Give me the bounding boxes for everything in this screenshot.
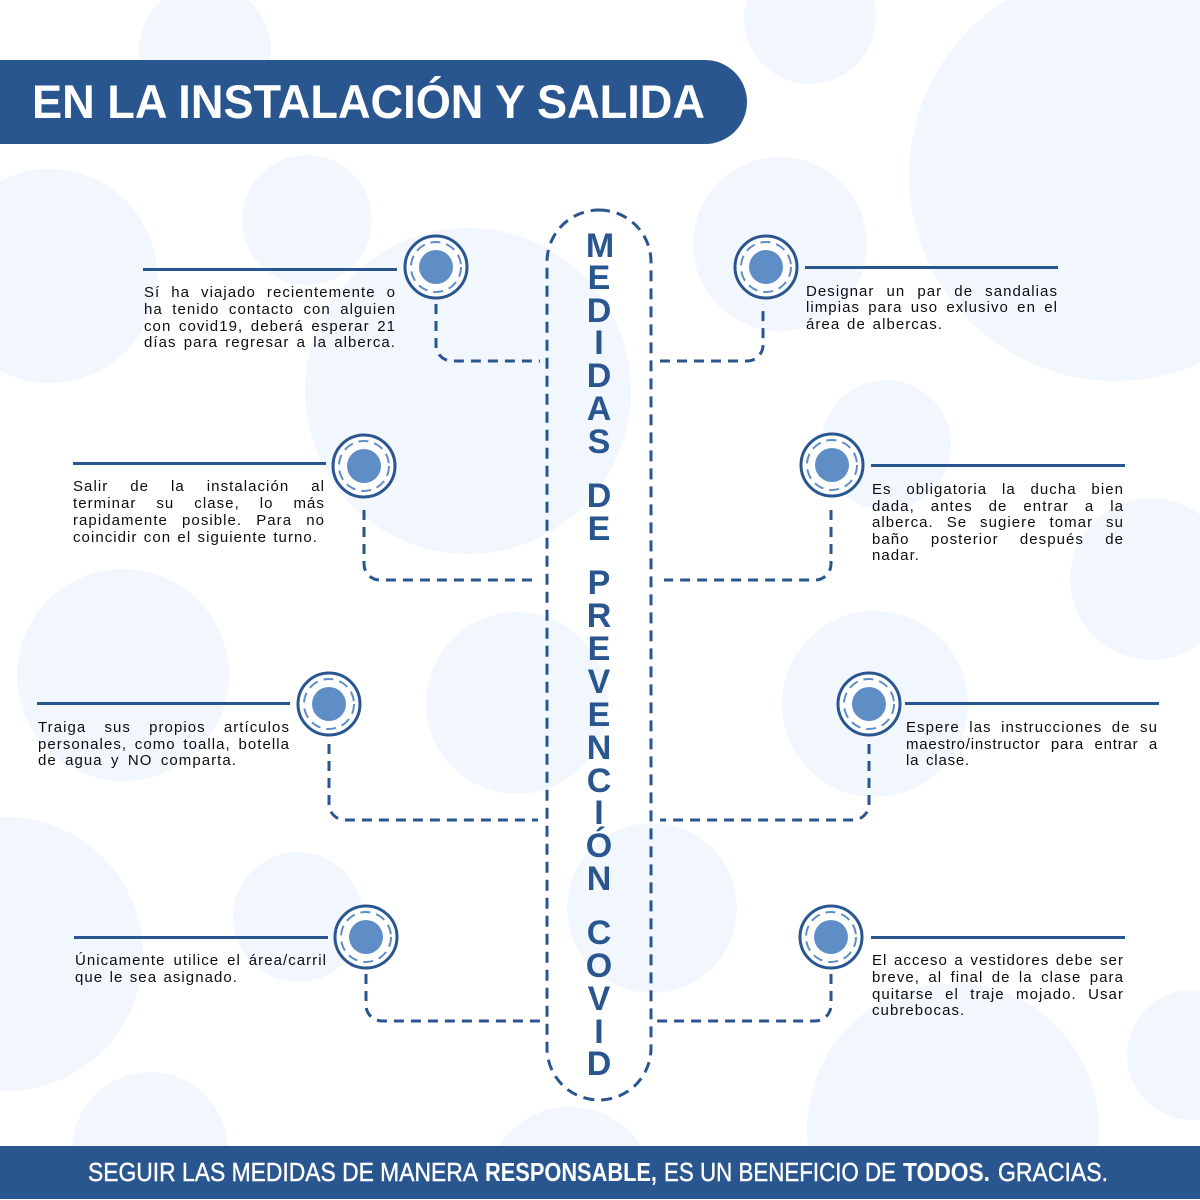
text: de agua y NO comparta.	[38, 752, 237, 769]
text: terminar su clase, lo más	[73, 495, 325, 512]
icon: node	[798, 904, 864, 970]
text: alberca. Se sugiere tomar su	[872, 514, 1124, 531]
text: Espere las instrucciones de su	[906, 719, 1158, 736]
text: limpias para uso exlusivo en el	[806, 299, 1058, 316]
text: breve, al final de la clase para	[872, 969, 1124, 986]
title banner	[0, 60, 747, 144]
item: viaje reciente	[143, 234, 540, 362]
icon: node	[800, 432, 864, 498]
item: artículos personales	[37, 672, 538, 822]
text	[38, 719, 290, 769]
item: instrucciones	[660, 672, 1159, 822]
text: quitarse el traje mojado. Usar	[872, 986, 1124, 1003]
icon: node	[734, 234, 798, 300]
footer banner	[0, 1146, 1200, 1199]
text	[144, 284, 396, 351]
item: salir de la instalación	[73, 434, 532, 582]
text	[906, 719, 1158, 769]
text: nadar.	[872, 547, 920, 564]
text: coincidir con el siguiente turno.	[73, 529, 318, 546]
text: personales, como toalla, botella	[38, 736, 290, 753]
text: Designar un par de sandalias	[806, 283, 1058, 300]
item: vestidores	[657, 904, 1125, 1022]
text: Traiga sus propios artículos	[38, 719, 290, 736]
item: área asignada	[74, 904, 540, 1022]
text	[73, 478, 325, 546]
item: sandalias	[660, 234, 1058, 362]
icon: node	[404, 234, 468, 300]
title: EN LA INSTALACIÓN Y SALIDA	[32, 75, 705, 128]
text: El acceso a vestidores debe ser	[872, 952, 1124, 969]
text: maestro/instructor para entrar a	[906, 736, 1158, 753]
text: cubrebocas.	[872, 1002, 965, 1019]
vertical heading: MEDIDAS DE PREVENCIÓN COVID	[586, 227, 614, 1083]
footer message: TODOS.	[903, 1157, 990, 1187]
text: área de albercas.	[806, 316, 943, 333]
footer message	[88, 1157, 1108, 1187]
text: que le sea asignado.	[75, 969, 238, 986]
text	[75, 952, 327, 986]
text: Salir de la instalación al	[73, 478, 325, 495]
text	[872, 481, 1124, 564]
item: ducha	[664, 432, 1125, 582]
text: Únicamente utilice el área/carril	[75, 952, 327, 969]
text: dada, antes de entrar a la	[872, 498, 1124, 515]
footer message: GRACIAS.	[998, 1157, 1108, 1187]
text: la clase.	[906, 752, 970, 769]
text: Sí ha viajado recientemente o	[144, 284, 396, 301]
footer message: RESPONSABLE,	[485, 1157, 657, 1187]
icon: node	[334, 904, 398, 970]
text: baño posterior después de	[872, 531, 1124, 548]
text: ha tenido contacto con alguien	[144, 301, 396, 318]
text	[806, 283, 1058, 333]
icon: node	[296, 672, 362, 736]
icon: node	[836, 672, 902, 736]
footer message: ES UN BENEFICIO DE	[664, 1157, 896, 1187]
text: rapidamente posible. Para no	[73, 512, 325, 529]
text: Es obligatoria la ducha bien	[872, 481, 1124, 498]
text: días para regresar a la alberca.	[144, 334, 396, 351]
footer message: SEGUIR LAS MEDIDAS DE MANERA	[88, 1157, 479, 1187]
text: con covid19, deberá esperar 21	[144, 318, 396, 335]
text	[872, 952, 1124, 1019]
central dashed capsule with vertical title	[546, 208, 652, 1102]
icon: node	[332, 434, 396, 498]
